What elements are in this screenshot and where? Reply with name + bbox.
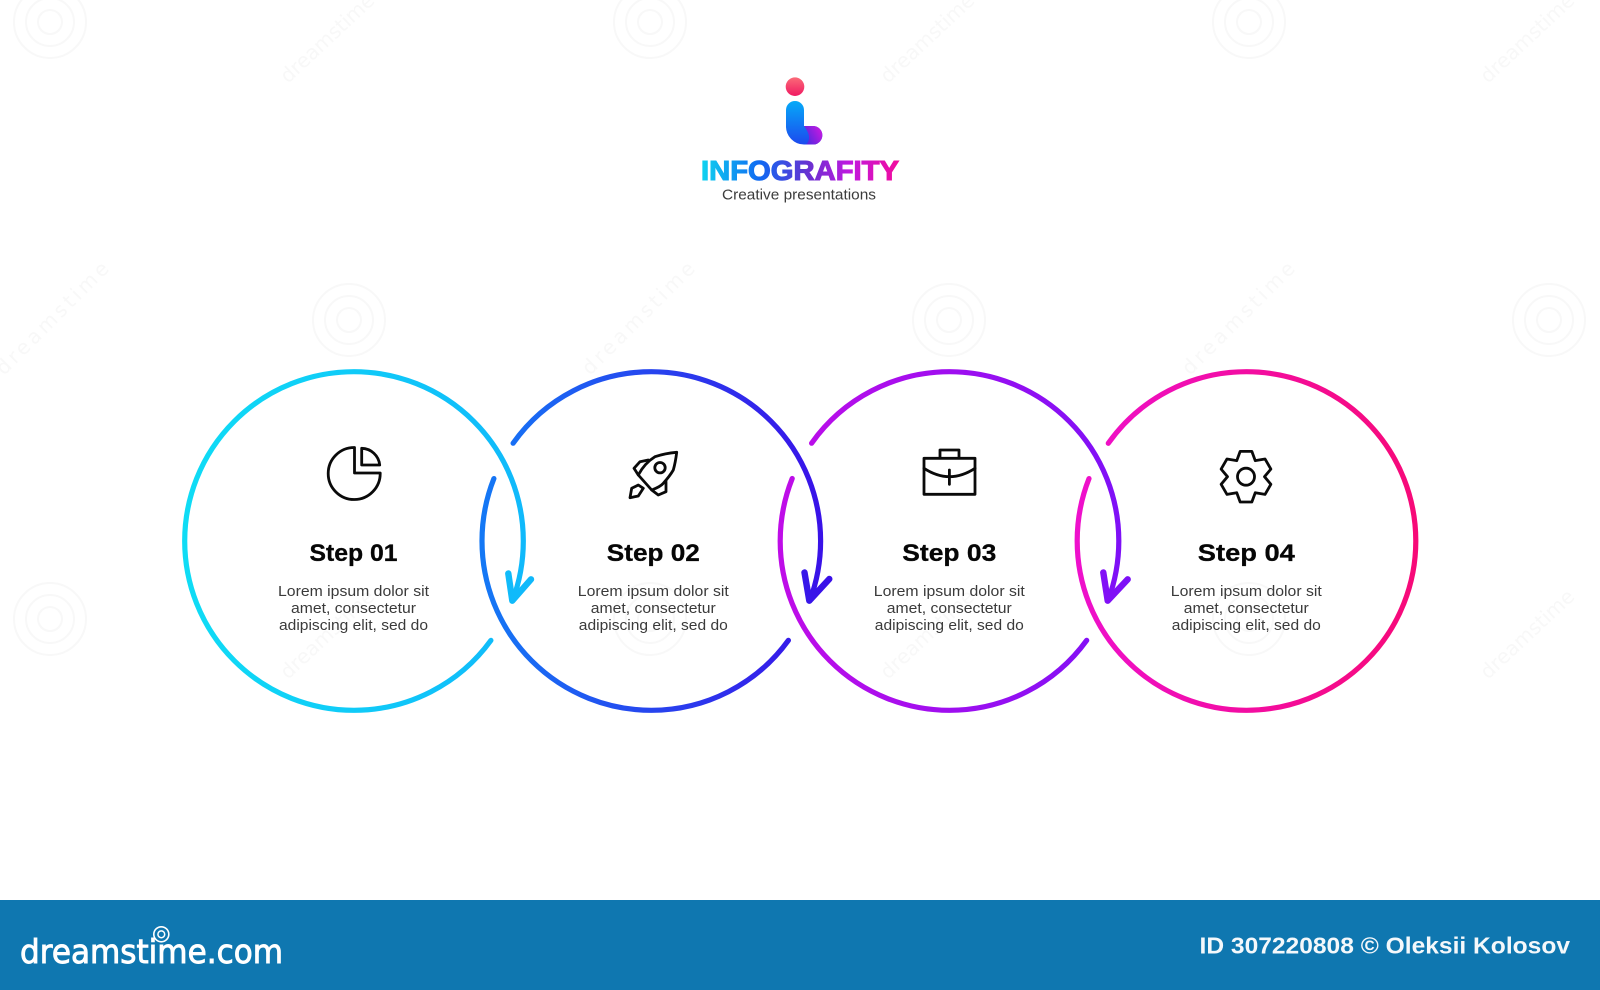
heading: step 01: Step 01 [310,540,398,567]
text block: step 02: amet, consectetur [591,600,716,617]
text block: step 03: adipiscing elit, sed do [875,617,1024,634]
watermark pattern: dreamstime [577,256,700,380]
footer brand: dreamstime: dreamstime.com [20,932,283,971]
ring with arrow: step 02 [482,372,829,710]
watermark pattern: dreamstime [275,584,379,684]
icon: pie chart [328,447,380,499]
text block: step 03: amet, consectetur [887,600,1012,617]
logo: infografity [701,77,899,204]
icon: rocket [630,452,677,498]
text block: step 01 [278,583,430,634]
text block: step 04: Lorem ipsum dolor sit [1171,583,1323,600]
text block: step 01: adipiscing elit, sed do [279,617,428,634]
step 01 panel [185,372,531,710]
watermark pattern: dreamstime [1475,584,1579,684]
icon: gear [1221,451,1271,502]
text block: step 04 [1171,583,1323,634]
watermark pattern: dreamstime [875,584,979,684]
text block: step 04: adipiscing elit, sed do [1172,617,1321,634]
footer credit: ID 307220808 © Oleksii Kolosov [1200,932,1570,958]
text block: step 01: Lorem ipsum dolor sit [278,583,430,600]
step 04 panel [1077,372,1416,710]
logo tagline: Creative presentations [722,188,876,204]
watermark pattern: dreamstime [1177,256,1300,380]
text block: step 02: Lorem ipsum dolor sit [578,583,730,600]
watermark pattern [0,0,1585,684]
ring with arrow: step 03 [780,372,1128,710]
heading: step 03: Step 03 [902,540,996,567]
text block: step 04: amet, consectetur [1184,600,1309,617]
text block: step 02 [578,583,730,634]
text block: step 03 [874,583,1026,634]
step 02 panel [482,372,829,710]
heading: step 04: Step 04 [1198,540,1296,567]
step 03 panel [780,372,1128,710]
logo icon [786,77,822,144]
text block: step 02: adipiscing elit, sed do [579,617,728,634]
ring: step 04 [1077,372,1416,710]
text block: step 03: Lorem ipsum dolor sit [874,583,1026,600]
icon: briefcase [924,450,975,494]
heading: step 02: Step 02 [607,540,700,567]
logo wordmark: INFOGRAFITY [701,155,899,186]
text block: step 01: amet, consectetur [291,600,416,617]
ring with arrow: step 01 [185,372,531,710]
footer bar [0,900,1600,990]
